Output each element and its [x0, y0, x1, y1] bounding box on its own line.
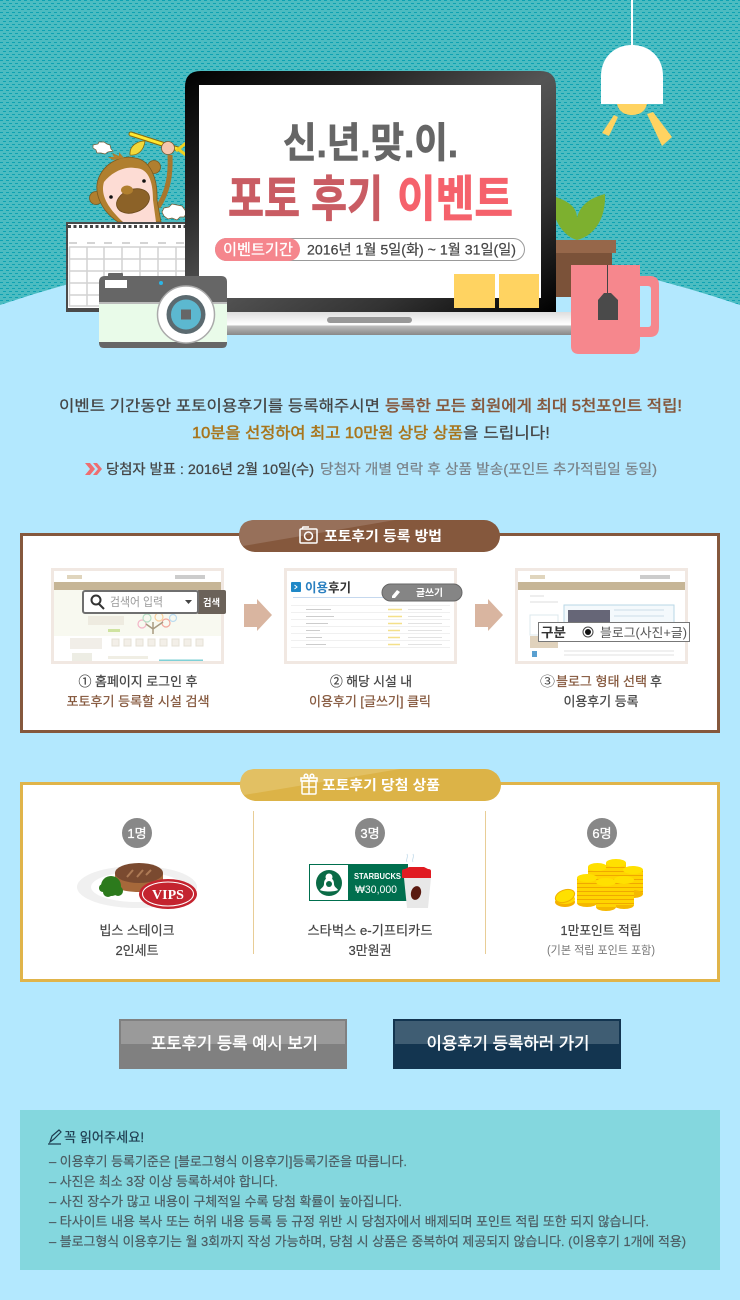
- panel: notice: [20, 1110, 720, 1270]
- blog option overlay: 블로그(사진+글): [600, 626, 687, 640]
- winner announcement: [85, 461, 657, 477]
- notice list: – 사진은 최소 3장 이상 등록하셔야 합니다.: [49, 1174, 278, 1189]
- icon: Starbucks gift card and cup: STARBUCKS: [354, 872, 402, 881]
- step 2 screenshot: 이용후기: [305, 580, 351, 595]
- prize 3: points: [547, 818, 655, 957]
- step 2 caption: [309, 674, 431, 709]
- icon: camera outline: [300, 527, 317, 543]
- search overlay: 검색: [203, 597, 220, 609]
- icon: potted plant: [550, 194, 616, 297]
- prize 2 caption: 3만원권: [348, 943, 392, 958]
- blog option overlay: 구분: [541, 625, 566, 640]
- title: photo review event: [228, 173, 513, 227]
- prize 1 caption: 2인세트: [115, 943, 159, 958]
- prize 1: VIPS steak: [77, 818, 197, 958]
- intro line 1: [59, 397, 682, 415]
- prize 3 caption: [547, 923, 655, 957]
- laptop: [185, 71, 571, 335]
- badge: 1 person: 1명: [127, 826, 147, 841]
- icon: steak plate with VIPS logo: VIPS: [152, 888, 184, 903]
- icon: calendar: [66, 222, 188, 312]
- blog option overlay: [538, 622, 690, 642]
- icon: Starbucks gift card and cup: [310, 854, 431, 908]
- button: go write a review: [393, 1019, 621, 1069]
- icon: mug with tea bag: [571, 265, 659, 354]
- heading pill: prizes: 포토후기 당첨 상품: [322, 777, 440, 793]
- step 2 screenshot: [286, 570, 462, 662]
- prize 1 caption: [100, 923, 175, 958]
- panel: prizes: [22, 769, 718, 980]
- icon: Starbucks gift card and cup: ₩30,000: [355, 884, 397, 896]
- notice list: – 사진 장수가 많고 내용이 구체적일 수록 당첨 확률이 높아집니다.: [49, 1194, 402, 1209]
- laptop base: [227, 312, 571, 335]
- panel: how to register: [22, 520, 718, 732]
- step 3 caption: 후: [650, 674, 662, 689]
- prize 2: Starbucks card: [308, 818, 433, 958]
- button: go write a review: 이용후기 등록하러 가기: [426, 1034, 590, 1053]
- prize 2 caption: [308, 923, 433, 958]
- search overlay: [83, 590, 226, 614]
- step 3 caption: 블로그 형태 선택: [556, 674, 647, 689]
- icon: pendant lamp: [601, 0, 672, 146]
- search overlay: 검색어 입력: [110, 595, 163, 609]
- step 1 caption: ① 홈페이지 로그인 후: [78, 674, 198, 689]
- heading pill: prizes: [240, 769, 501, 801]
- notice list: [49, 1154, 686, 1249]
- title: photo review event: 포토 후기: [228, 173, 383, 227]
- winner announcement: 당첨자 개별 연락 후 상품 발송(포인트 추가적립일 동일): [320, 461, 657, 477]
- prize 3 caption: 1만포인트 적립: [560, 923, 642, 938]
- step 2 caption: ② 해당 시설 내: [330, 674, 412, 689]
- notice list: – 블로그형식 이용후기는 월 3회까지 작성 가능하며, 당첨 시 상품은 중복하여 제공되지 않습니다. (이용후기 1개에 적용): [49, 1234, 686, 1249]
- prize 1 caption: 빕스 스테이크: [100, 923, 175, 938]
- intro text: [59, 397, 682, 477]
- step 1 caption: 포토후기 등록할 시설 검색: [66, 694, 210, 709]
- intro line 1: 이벤트 기간동안 포토이용후기를 등록해주시면: [59, 397, 380, 415]
- winner announcement: 당첨자 발표 : 2016년 2월 10일(수): [106, 461, 314, 477]
- intro line 2: 을 드립니다!: [463, 424, 550, 442]
- button: view photo review example: [119, 1019, 347, 1069]
- title: photo review event: 이벤트: [397, 173, 513, 227]
- icon: gift: [301, 774, 317, 794]
- notice list: – 타사이트 내용 복사 또는 허위 내용 등록 등 규정 위반 시 당첨자에서 배제되며 포인트 적립 또한 되지 않습니다.: [49, 1214, 649, 1229]
- icon: pencil: [48, 1130, 61, 1144]
- icon: monkey: [90, 134, 186, 222]
- write button overlay: 글쓰기: [416, 587, 443, 599]
- sticky notes: [454, 274, 539, 308]
- intro line 2: [192, 424, 550, 442]
- prize 2 caption: 스타벅스 e-기프티카드: [308, 923, 433, 938]
- event period badge: [215, 238, 524, 261]
- badge: 6 people: 6명: [592, 826, 612, 841]
- step 3 caption: 이용후기 등록: [564, 694, 639, 709]
- arrow 2: [475, 599, 503, 631]
- button: view photo review example: 포토후기 등록 예시 보기: [151, 1034, 318, 1053]
- step 2 caption: 이용후기 [글쓰기] 클릭: [309, 694, 431, 709]
- step 3 caption: [540, 674, 662, 709]
- step 3 screenshot: [516, 570, 690, 662]
- icon: coin stacks: [554, 859, 643, 911]
- prize 3 caption: (기본 적립 포인트 포함): [547, 944, 655, 957]
- intro line 2: 10분을 선정하여 최고 10만원 상당 상품: [192, 424, 463, 442]
- notice list: – 이용후기 등록기준은 [블로그형식 이용후기]등록기준을 따릅니다.: [49, 1154, 407, 1169]
- icon: camera: [99, 273, 227, 348]
- hero illustration: [0, 0, 740, 354]
- step 3 caption: ③: [540, 674, 555, 689]
- heading pill: registration method: [239, 520, 500, 552]
- write button overlay: [382, 584, 462, 601]
- heading pill: registration method: 포토후기 등록 방법: [324, 528, 442, 544]
- event period badge: 2016년 1월 5일(화) ~ 1월 31일(일): [307, 242, 516, 258]
- step 1 caption: [66, 674, 210, 709]
- step 1 screenshot: [52, 570, 226, 662]
- title: new year greeting: 신.년.맞.이.: [283, 120, 458, 166]
- arrow 1: [244, 599, 272, 631]
- event period badge: 이벤트기간: [223, 242, 293, 258]
- intro line 1: 등록한 모든 회원에게 최대 5천포인트 적립!: [385, 397, 682, 415]
- dotted teal wall: [0, 0, 740, 305]
- badge: 3 people: 3명: [360, 826, 380, 841]
- notice heading: 꼭 읽어주세요!: [64, 1130, 144, 1145]
